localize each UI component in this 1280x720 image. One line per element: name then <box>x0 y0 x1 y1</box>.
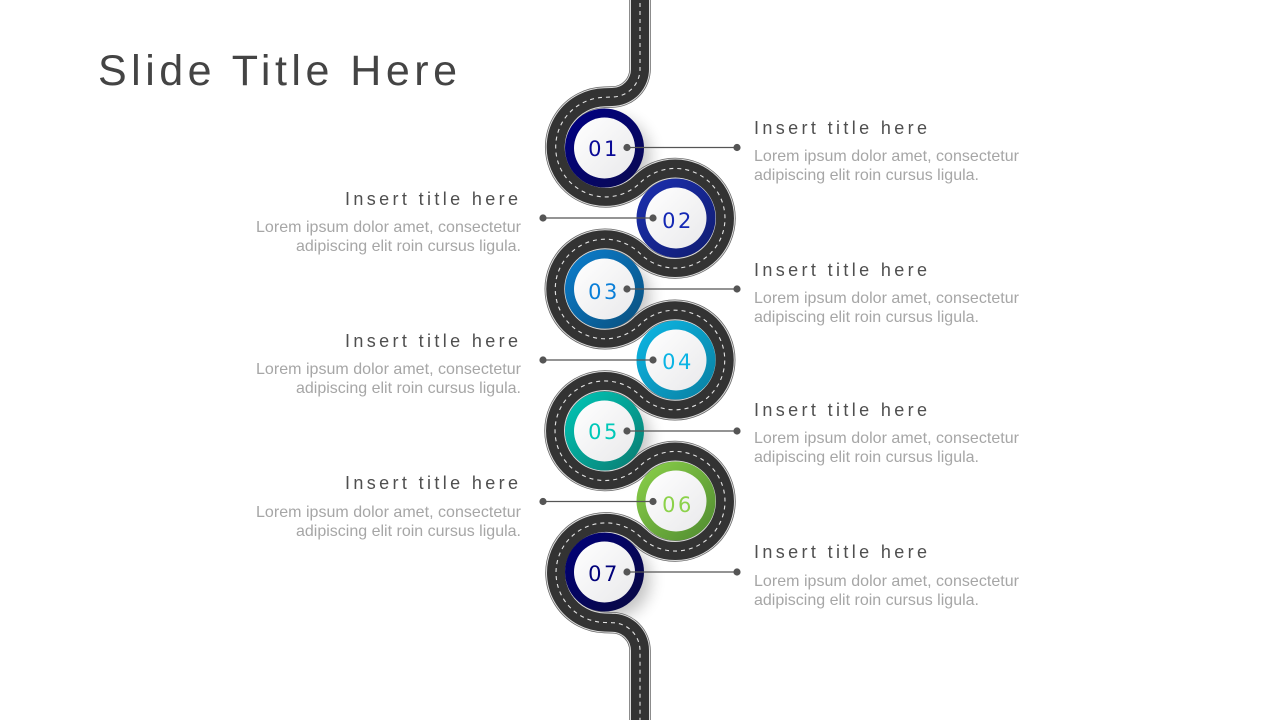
text block 01: Lorem ipsum dolor amet, consectetur <box>754 148 1020 165</box>
milestone 07: 07 <box>588 562 620 586</box>
text block 07 <box>754 542 1020 609</box>
milestone 05: 05 <box>588 420 620 444</box>
milestone 04 <box>636 320 716 400</box>
milestone 02: 02 <box>662 209 694 233</box>
text block 05: adipiscing elit roin cursus ligula. <box>754 449 979 466</box>
text block 04: adipiscing elit roin cursus ligula. <box>296 380 521 397</box>
text block 02: Insert title here <box>345 189 518 209</box>
text block 04 <box>256 331 522 397</box>
text block 01: adipiscing elit roin cursus ligula. <box>754 167 979 184</box>
text block 06: Lorem ipsum dolor amet, consectetur <box>256 504 522 521</box>
text block 04: Insert title here <box>345 331 518 351</box>
text block 03: Lorem ipsum dolor amet, consectetur <box>754 290 1020 307</box>
winding road <box>555 0 725 720</box>
milestone 04: 04 <box>662 350 694 374</box>
text block 02: Lorem ipsum dolor amet, consectetur <box>256 219 522 236</box>
leader 01 <box>623 144 741 151</box>
milestone 01: 01 <box>588 137 620 161</box>
text block 06: adipiscing elit roin cursus ligula. <box>296 523 521 540</box>
leader 07 <box>623 568 741 576</box>
text block 01: Insert title here <box>754 118 927 138</box>
circle shadows <box>574 118 720 618</box>
milestone 03: 03 <box>588 280 620 304</box>
text block 04: Lorem ipsum dolor amet, consectetur <box>256 361 522 378</box>
leader 03 <box>623 285 741 293</box>
text block 02: adipiscing elit roin cursus ligula. <box>296 238 521 255</box>
leader 05 <box>623 427 741 435</box>
text block 06 <box>256 473 522 540</box>
text block 07: Lorem ipsum dolor amet, consectetur <box>754 573 1020 590</box>
text block 05 <box>754 400 1020 466</box>
milestone 02 <box>636 178 716 258</box>
milestone 07 <box>565 532 644 612</box>
milestone 06: 06 <box>662 493 694 517</box>
text block 01 <box>754 118 1020 184</box>
milestone 01 <box>565 108 644 188</box>
text block 05: Lorem ipsum dolor amet, consectetur <box>754 430 1020 447</box>
leader 06 <box>539 498 657 505</box>
text block 07: adipiscing elit roin cursus ligula. <box>754 592 979 609</box>
text block 02 <box>256 189 522 255</box>
text block 03: Insert title here <box>754 260 927 280</box>
leader 04 <box>539 356 657 364</box>
milestone 03 <box>565 250 644 328</box>
title: Slide Title Here <box>98 47 457 95</box>
milestone 05 <box>565 392 644 470</box>
text block 07: Insert title here <box>754 542 927 562</box>
text block 06: Insert title here <box>345 473 518 493</box>
text block 03: adipiscing elit roin cursus ligula. <box>754 309 979 326</box>
leader 02 <box>539 214 657 222</box>
text block 05: Insert title here <box>754 400 927 420</box>
text block 03 <box>754 260 1020 326</box>
milestone 06 <box>636 462 716 540</box>
